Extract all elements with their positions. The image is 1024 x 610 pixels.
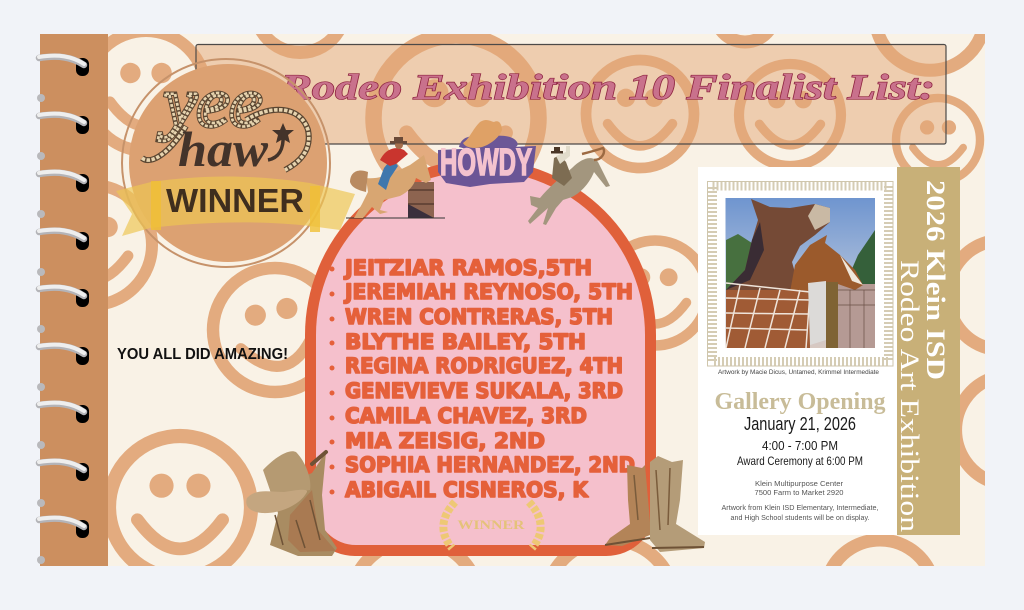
ribbon banner: [116, 176, 355, 236]
icon: cowboy hat and boots left: [246, 451, 337, 556]
rope lettering yee: yee: [158, 65, 262, 142]
icon: cowboy hat: [459, 120, 518, 150]
spiral binding strip: [37, 34, 108, 566]
painting caption: Artwork by Macie Dicus, Untamed, Krimmel Intermediate: [718, 369, 879, 376]
list of finalists: [330, 256, 635, 502]
howdy sign with hat: [438, 120, 536, 187]
striped frame: [712, 186, 888, 362]
title panel: [196, 44, 946, 144]
list of finalists: REGINA RODRIGUEZ, 4TH: [345, 354, 623, 378]
list of finalists: GENEVIEVE SUKALA, 3RD: [345, 379, 623, 403]
painting of two horses: [726, 198, 876, 348]
flyer title band: [895, 167, 960, 535]
ribbon word winner: WINNER: [166, 182, 304, 219]
flyer panel: [698, 167, 960, 535]
list of finalists: SOPHIA HERNANDEZ, 2ND: [345, 453, 635, 477]
yee haw winner badge: [116, 59, 355, 267]
note: Artwork from Klein ISD Elementary, Intermediate,: [722, 505, 879, 512]
laurel winner emblem: WINNER: [458, 517, 525, 532]
venue: [754, 481, 844, 497]
event date and time: January 21, 2026: [744, 414, 856, 434]
flyer title band: Rodeo Art Exhibition: [895, 260, 924, 532]
event date and time: [737, 414, 863, 468]
list of finalists: BLYTHE BAILEY, 5TH: [345, 330, 586, 354]
rope lettering yee: [142, 65, 309, 170]
list of finalists: JEITZIAR RAMOS,5TH: [343, 256, 592, 280]
rope lettering yee: yee: [158, 65, 262, 142]
laurel winner emblem: [443, 502, 541, 548]
list of finalists: MIA ZEISIG, 2ND: [345, 429, 545, 453]
venue: Klein Multipurpose Center: [755, 481, 844, 488]
title: Rodeo Exhibition 10 Finalist List:: [280, 67, 935, 107]
event date and time: 4:00 - 7:00 PM: [762, 438, 838, 453]
list of finalists: WREN CONTRERAS, 5TH: [345, 305, 613, 329]
arch panel: [305, 160, 656, 556]
note: and High School students will be on display.: [730, 515, 870, 522]
list of finalists: CAMILA CHAVEZ, 3RD: [345, 404, 587, 428]
icon: cowboy boots right: [605, 456, 705, 552]
script word haw: haw: [178, 121, 269, 177]
spiral rings: [37, 56, 89, 564]
list of finalists: JEREMIAH REYNOSO, 5TH: [343, 280, 633, 304]
flyer title band: 2026 Klein ISD: [921, 180, 950, 380]
gallery opening heading: Gallery Opening: [714, 389, 886, 415]
icon: bull rider: [528, 146, 610, 225]
list of finalists: ABIGAIL CISNEROS, K: [345, 478, 589, 502]
star: [272, 123, 294, 143]
icon: barrel racer: [346, 137, 445, 218]
callout: YOU ALL DID AMAZING!: [117, 346, 288, 363]
venue: 7500 Farm to Market 2920: [754, 490, 844, 497]
event date and time: Award Ceremony at 6:00 PM: [737, 454, 863, 468]
howdy sign with hat: HOWDY: [440, 142, 532, 184]
note: [722, 505, 879, 522]
